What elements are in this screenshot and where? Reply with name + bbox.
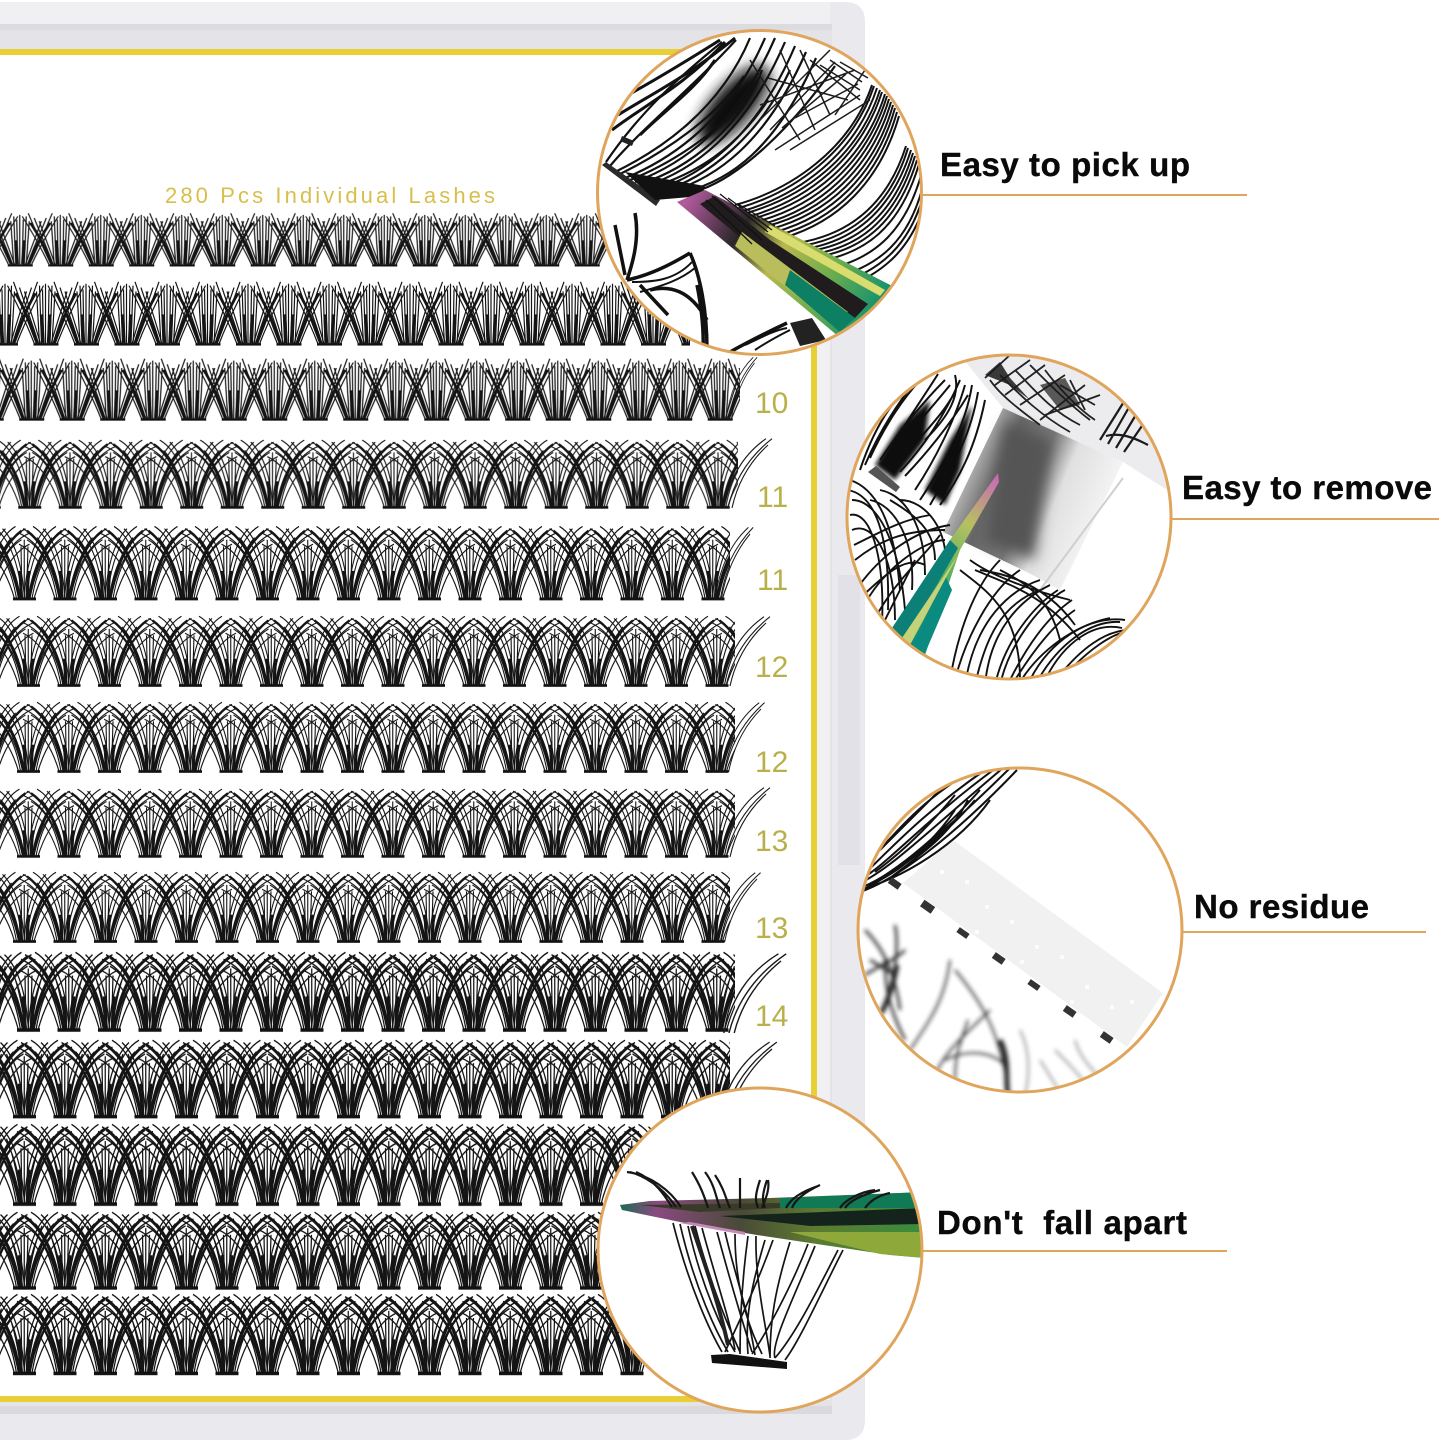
- yellow border of the card: [0, 49, 817, 1402]
- lash length numbers: 11: [757, 564, 788, 597]
- row 2: [0, 278, 690, 347]
- white card: [0, 55, 811, 1396]
- lash length numbers: 11: [757, 481, 788, 514]
- magnified strip without residue: [858, 768, 1163, 1095]
- circle outline: [598, 30, 922, 354]
- callout 1: easy to pick up: [598, 30, 926, 354]
- lash length numbers: 13: [755, 912, 788, 945]
- row 7, length 12: [0, 698, 765, 774]
- row 5, length 11: [0, 522, 753, 602]
- callout 3: no residue: [858, 768, 1182, 1095]
- circle outline: [598, 1088, 922, 1412]
- leader line 1: [921, 194, 1247, 196]
- heading: product count: 280 Pcs Individual Lashes: [165, 183, 495, 208]
- magnified lash cluster on tweezers: [620, 1172, 925, 1369]
- label: easy to remove: Easy to remove: [1182, 469, 1432, 506]
- lash length numbers: 14: [755, 1000, 788, 1033]
- lash length numbers: 13: [755, 825, 788, 858]
- lash length numbers: 12: [755, 651, 788, 684]
- magnified lashes and tweezers: [602, 38, 926, 352]
- row 10, length 14: [0, 950, 786, 1035]
- lash length numbers: 10: [755, 387, 788, 420]
- row 3, length 10: [0, 355, 757, 422]
- circle outline: [847, 355, 1171, 679]
- circle outline: [858, 768, 1182, 1092]
- row 8, length 13: [0, 785, 770, 859]
- lash tray frame: [0, 2, 865, 1440]
- row 14: [0, 1292, 650, 1377]
- leader line 3: [1182, 931, 1426, 933]
- row 12: [0, 1122, 670, 1208]
- label: easy to pick up: Easy to pick up: [940, 146, 1190, 183]
- callout 2: easy to remove: [847, 355, 1180, 685]
- leader line 4: [921, 1250, 1227, 1252]
- label: no residue: No residue: [1194, 888, 1369, 925]
- row 1: [0, 210, 620, 268]
- row 9, length 13: [0, 868, 761, 944]
- callout 4: don't fall apart: [598, 1088, 925, 1412]
- row 11, length 14: [0, 1038, 777, 1120]
- row 13: [0, 1210, 660, 1292]
- lash length numbers: 12: [755, 746, 788, 779]
- row 6, length 12: [0, 612, 770, 688]
- lash length numbers: [755, 387, 788, 1033]
- row 4, length 11: [0, 436, 772, 510]
- label: don't fall apart: Don't fall apart: [937, 1204, 1187, 1241]
- lash rows: [0, 210, 786, 1377]
- magnified tape, lashes and tweezers: [848, 355, 1180, 685]
- leader line 2: [1171, 518, 1439, 520]
